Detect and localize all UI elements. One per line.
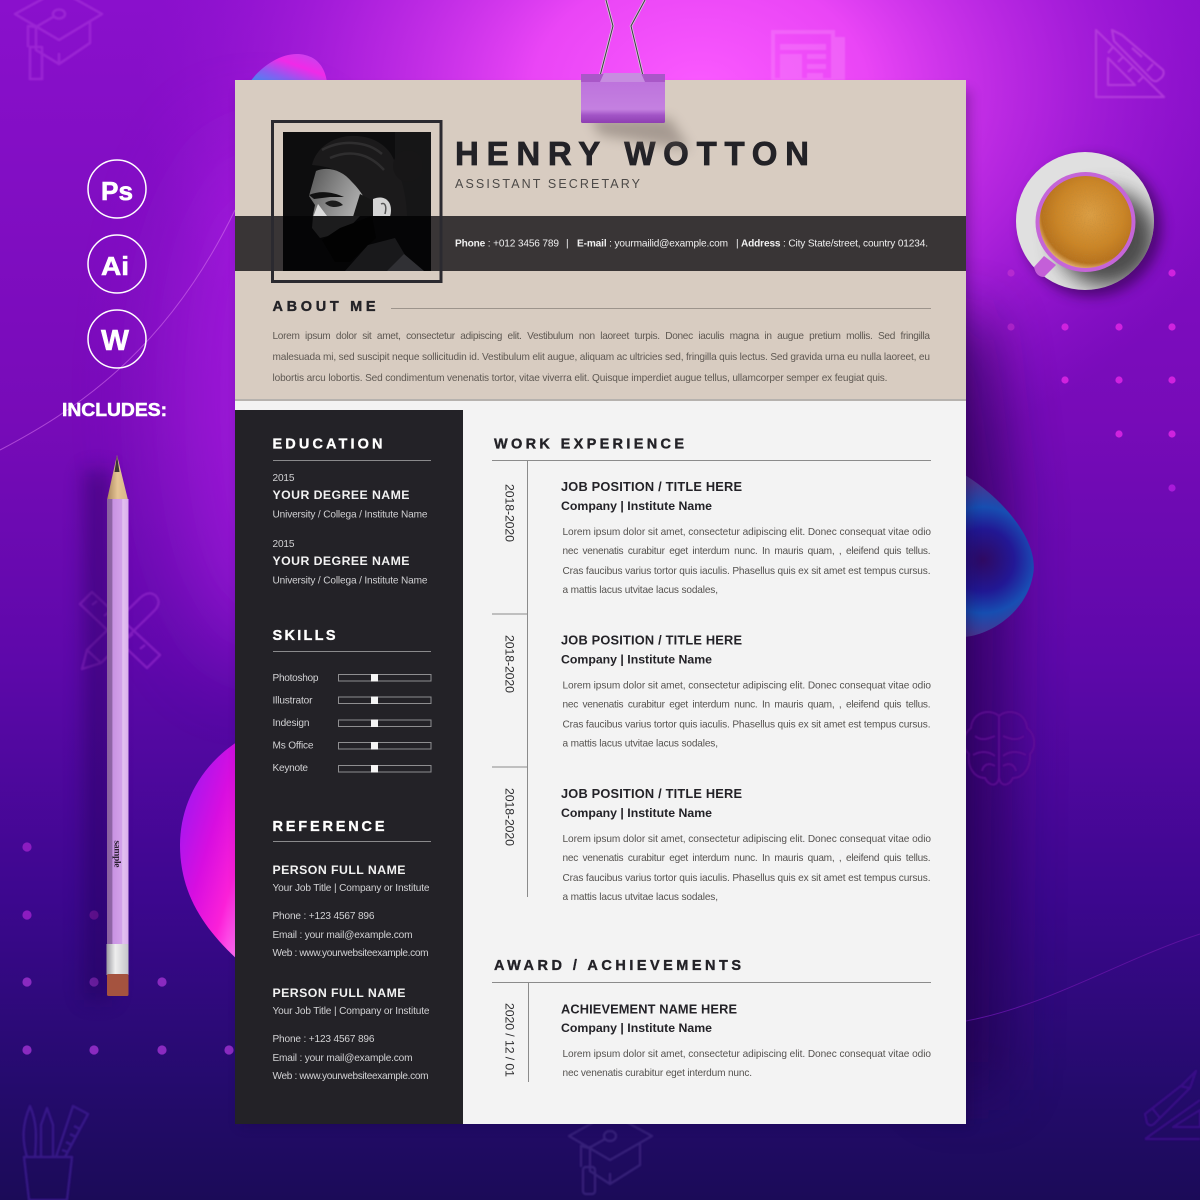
icon: brain — [964, 712, 1034, 785]
icon: newspaper top — [771, 30, 845, 80]
section: education: EDUCATION — [272, 436, 382, 452]
section: education — [272, 436, 431, 586]
job entry 3: JOB POSITION / TITLE HERE — [561, 786, 742, 801]
job entry 1: Cras faucibus varius tortor quis iaculis. Phasellus quis ex sit amet est tempus cursus. — [562, 566, 930, 577]
job entry 2: Lorem ipsum dolor sit amet, consectetur adipiscing elit. Donec consequat vitae odio — [562, 680, 931, 692]
icon: graduation cap top left — [15, 0, 102, 79]
reference person two: Your Job Title | Company or Institute — [272, 1006, 430, 1017]
section: education: YOUR DEGREE NAME — [272, 554, 410, 568]
about paragraph: malesuada mi, sed suscipit neque sollicitudin id. Vestibulum elit augue, aliquam ac ultricies sed, fringilla quis lectus. Sed gravida urna eu nulla laoreet, eu — [272, 352, 930, 363]
skill: ms office: Ms Office — [272, 740, 314, 752]
job entry 2 — [502, 632, 931, 750]
achievement entry — [502, 1002, 931, 1079]
contact details — [455, 238, 928, 250]
section: skills: SKILLS — [272, 628, 336, 644]
coffee cup — [1016, 152, 1162, 297]
divider between header and body — [235, 399, 966, 401]
job entry 3: Company | Institute Name — [561, 806, 712, 820]
panel: beige header — [235, 80, 966, 400]
icon: word badge — [88, 310, 146, 368]
job subtitle: ASSISTANT SECRETARY — [455, 177, 641, 191]
panel: dark sidebar — [235, 410, 463, 1124]
bun — [394, 159, 395, 162]
reference person two: Email : your mail@example.com — [272, 1053, 412, 1064]
skill: photoshop — [272, 673, 431, 684]
about rule — [391, 308, 931, 309]
job entry 1: Company | Institute Name — [561, 499, 712, 513]
skill: keynote: Keynote — [272, 763, 308, 774]
reference person two — [272, 986, 430, 1082]
skill: ms office — [272, 740, 431, 752]
binder clip — [581, 0, 690, 150]
includes label: INCLUDES: — [62, 400, 167, 420]
contact details: | — [736, 238, 739, 250]
section: skills — [272, 628, 431, 774]
dot grid left — [22, 842, 234, 1055]
reference person one: Email : your mail@example.com — [272, 930, 412, 941]
pencil: sample — [112, 840, 122, 868]
heading: work experience: WORK EXPERIENCE — [494, 436, 684, 452]
job entry 1: JOB POSITION / TITLE HERE — [561, 479, 742, 494]
photo lower half under band — [283, 216, 431, 271]
decorative curve lines — [0, 210, 1200, 1021]
skill: photoshop: Photoshop — [272, 673, 319, 684]
achievement entry: nec venenatis curabitur eget interdum nunc. — [562, 1068, 752, 1079]
job entry 3: Cras faucibus varius tortor quis iaculis. Phasellus quis ex sit amet est tempus cursus. — [562, 873, 930, 884]
heading: awards: AWARD / ACHIEVEMENTS — [494, 958, 741, 974]
hair — [312, 136, 395, 216]
job entry 1: a mattis lacus utvitae lacus sodales, — [562, 585, 718, 596]
face — [309, 168, 363, 216]
reference person two: PERSON FULL NAME — [272, 986, 406, 1000]
section: education: University / Collega / Institute Name — [272, 576, 428, 586]
reference person one: Web : www.yourwebsiteexample.com — [272, 948, 428, 959]
paper shadow — [240, 90, 970, 1126]
skill: indesign — [272, 718, 431, 729]
reference person two: Web : www.yourwebsiteexample.com — [272, 1071, 428, 1082]
job entry 1: nec venenatis curabitur eget interdum nunc. In mauris quam, , eleifend quis tellus. — [562, 546, 930, 557]
hair highlight — [322, 143, 384, 170]
about paragraph: lobortis arcu lobortis. Sed condimentum venenatis tortor, vitae viverra elit. Quisque imperdiet augue tellus, ullamcorper semper ex feugiat quis. — [272, 373, 887, 384]
icon: pencil cup — [24, 1106, 88, 1200]
section: education: University / Collega / Institute Name — [272, 510, 428, 520]
icon: photoshop badge — [88, 160, 146, 218]
achievement entry: Lorem ipsum dolor sit amet, consectetur adipiscing elit. Donec consequat vitae odio — [562, 1049, 931, 1060]
job entry 1: 2018-2020 — [502, 484, 516, 542]
icon: photoshop badge: Ps — [101, 176, 133, 206]
nose bridge highlight — [314, 204, 327, 216]
photo upper half — [283, 132, 431, 225]
portrait photo — [283, 132, 431, 271]
icon: pen and set square bottom right — [1145, 1071, 1200, 1139]
achievement entry: 2020 / 12 / 01 — [502, 1003, 516, 1077]
job entry 3: Lorem ipsum dolor sit amet, consectetur adipiscing elit. Donec consequat vitae odio — [562, 834, 931, 845]
section: education: YOUR DEGREE NAME — [272, 488, 410, 502]
section: reference: REFERENCE — [272, 819, 385, 835]
blob: right — [960, 472, 1034, 637]
icon: illustrator badge — [88, 235, 146, 293]
job entry 2: Company | Institute Name — [561, 652, 712, 666]
dot grid right — [1007, 269, 1176, 492]
portrait frame — [272, 122, 441, 282]
section: reference — [272, 819, 431, 1082]
awards rules — [492, 982, 931, 1082]
contact band — [235, 216, 966, 271]
section: education: 2015 — [272, 539, 295, 550]
reference person one: PERSON FULL NAME — [272, 863, 406, 877]
icon: word badge: W — [101, 325, 130, 357]
job entry 2: nec venenatis curabitur eget interdum nunc. In mauris quam, , eleifend quis tellus. — [562, 700, 930, 710]
eye — [325, 201, 343, 207]
heading: name: HENRY WOTTON — [455, 135, 809, 172]
icon: set square and pencil top right — [1096, 30, 1164, 97]
skill: illustrator — [272, 696, 431, 706]
contact details: | — [566, 238, 569, 250]
job entry 2: 2018-2020 — [502, 635, 516, 693]
job entry 2: Cras faucibus varius tortor quis iaculis. Phasellus quis ex sit amet est tempus cursus. — [562, 720, 930, 730]
job entry 3: 2018-2020 — [502, 788, 516, 846]
contact details: E-mail : yourmailid@example.com — [577, 238, 728, 250]
about paragraph — [272, 331, 930, 384]
job entry 2: JOB POSITION / TITLE HERE — [561, 632, 742, 648]
skill: indesign: Indesign — [272, 718, 310, 729]
sideburn — [353, 194, 370, 216]
section: education: 2015 — [272, 473, 295, 484]
ear — [373, 198, 391, 216]
panel: white body — [235, 400, 966, 1124]
reference person two: Phone : +123 4567 896 — [272, 1034, 375, 1045]
eyebrow — [309, 192, 344, 199]
icon: crossed ruler and pencil — [80, 592, 160, 669]
resume document — [235, 80, 966, 1124]
skill: keynote — [272, 763, 431, 774]
job entry 3 — [502, 786, 931, 903]
reference person one — [272, 863, 430, 959]
reference person one: Your Job Title | Company or Institute — [272, 883, 430, 894]
contact details: Address : City State/street, country 01234. — [741, 238, 928, 250]
work experience timeline rules — [492, 460, 931, 897]
about paragraph: Lorem ipsum dolor sit amet, consectetur adipiscing elit. Vestibulum non laoreet turpis. Donec iaculis magna in augue pretium mollis. Sed fringilla — [272, 331, 930, 342]
job entry 3: nec venenatis curabitur eget interdum nunc. In mauris quam, , eleifend quis tellus. — [562, 853, 930, 864]
achievement entry: ACHIEVEMENT NAME HERE — [561, 1002, 737, 1016]
job entry 1 — [502, 479, 931, 596]
icon: illustrator badge: Ai — [101, 251, 129, 281]
reference person one: Phone : +123 4567 896 — [272, 911, 375, 922]
job entry 1: Lorem ipsum dolor sit amet, consectetur adipiscing elit. Donec consequat vitae odio — [562, 527, 931, 538]
heading: about me: ABOUT ME — [272, 299, 376, 315]
icon: graduation cap bottom — [569, 1113, 652, 1194]
job entry 2: a mattis lacus utvitae lacus sodales, — [562, 738, 718, 750]
pencil — [84, 455, 128, 1000]
achievement entry: Company | Institute Name — [561, 1021, 712, 1035]
contact details: Phone : +012 3456 789 — [455, 238, 559, 250]
blob: left — [180, 740, 240, 962]
job entry 3: a mattis lacus utvitae lacus sodales, — [562, 892, 718, 903]
skill: illustrator: Illustrator — [272, 696, 313, 706]
blob: top left — [250, 54, 327, 82]
